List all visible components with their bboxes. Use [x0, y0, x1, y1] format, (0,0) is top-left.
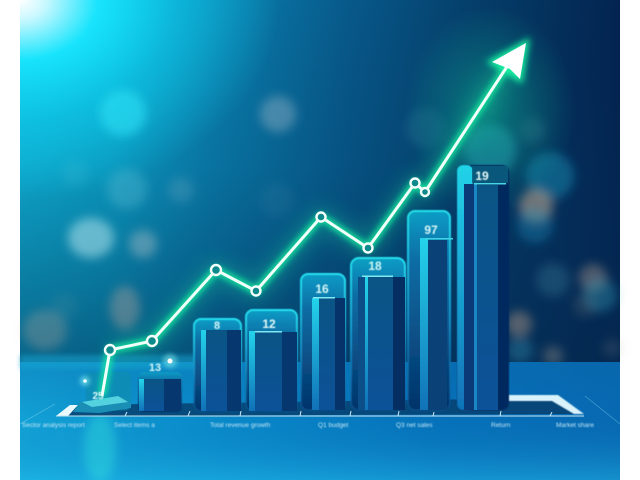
bar 3	[194, 319, 241, 411]
axis labels: Market share	[556, 422, 594, 429]
axis labels: Q3 net sales	[396, 422, 433, 429]
value label: 19	[475, 169, 489, 183]
bar 6	[351, 258, 405, 410]
chart baseboard and axis	[20, 395, 620, 424]
floor surface	[20, 355, 620, 480]
bar 1	[73, 372, 131, 413]
value label: 8	[214, 320, 220, 332]
bar 7	[408, 211, 453, 410]
background gradient	[20, 0, 620, 370]
bar 4	[246, 310, 297, 411]
value label: 16	[315, 282, 329, 296]
growth line glow	[102, 43, 526, 396]
value label: 12	[262, 317, 276, 331]
arrow glow background	[405, 5, 575, 215]
axis labels: Return	[491, 422, 511, 429]
axis labels: Q1 budget	[318, 422, 349, 429]
sparkles	[80, 354, 177, 386]
growth line	[102, 62, 510, 396]
bar 5	[301, 274, 345, 410]
arrowhead	[492, 43, 526, 79]
axis labels: Sector analysis report	[22, 422, 85, 429]
axis labels: Select items a	[114, 422, 155, 429]
value label: 18	[368, 259, 382, 273]
bar 1 value label: 25	[92, 391, 104, 402]
value label: 97	[424, 223, 438, 237]
bokeh lights	[23, 90, 621, 366]
bar 8	[457, 165, 509, 410]
bar 2	[138, 362, 182, 412]
value label: 13	[149, 362, 161, 374]
axis labels	[22, 422, 594, 429]
growth line wide glow	[110, 62, 510, 350]
axis labels: Total revenue growth	[210, 422, 271, 429]
line markers	[105, 178, 429, 355]
